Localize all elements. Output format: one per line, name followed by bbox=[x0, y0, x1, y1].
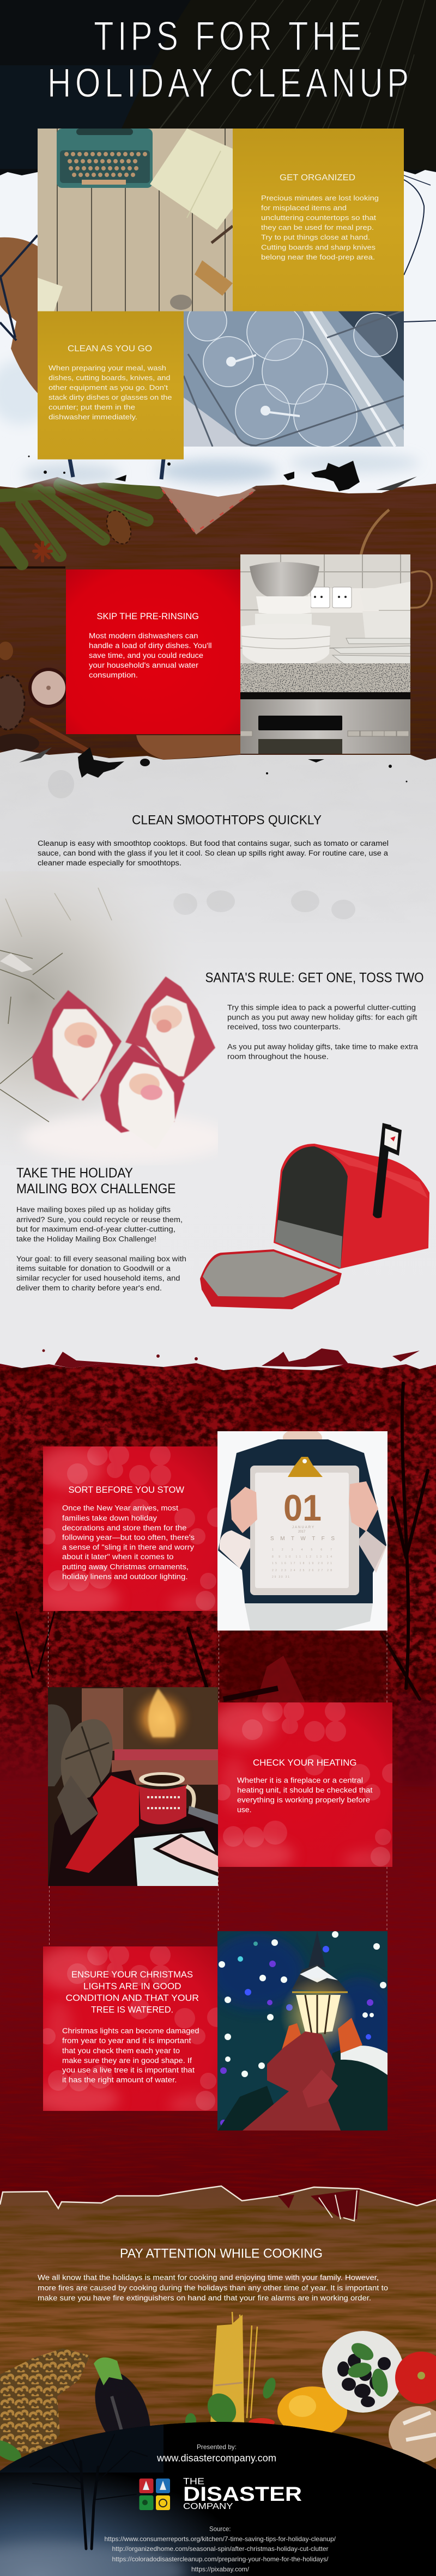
sources bbox=[105, 2525, 336, 2573]
text block: cooking: make sure you have fire extinguishers on hand and that your fire alarms are in working order. bbox=[38, 2294, 371, 2302]
text block: save time, and you could reduce bbox=[89, 651, 203, 660]
paper torn edge over red bbox=[0, 1345, 436, 1370]
text block: they can be used for meal prep. bbox=[261, 223, 374, 231]
text block bbox=[237, 1777, 373, 1814]
heading: SKIP THE PRE-RINSING bbox=[97, 611, 199, 621]
text block: smoothtops bbox=[38, 839, 389, 867]
text block: santa's rule: room throughout the house. bbox=[227, 1052, 329, 1061]
background: dark broom header bbox=[0, 0, 436, 175]
title: TIPS FOR THE bbox=[94, 14, 361, 59]
photo: dishes on kitchen counter above dishwasher bbox=[240, 554, 410, 754]
heading: LIGHTS ARE IN GOOD bbox=[83, 1981, 181, 1991]
heading: GET ORGANIZED bbox=[280, 173, 355, 182]
icon: candle bbox=[28, 668, 69, 708]
heading: SORT BEFORE YOU STOW bbox=[69, 1485, 184, 1495]
text block: mailing box: Have mailing boxes piled up as holiday gifts bbox=[16, 1206, 171, 1213]
icon: plate with olives bbox=[322, 2331, 404, 2413]
panel: get organized bbox=[233, 129, 404, 312]
icon: basil leaves bbox=[0, 2376, 278, 2465]
text block: smoothtops: sauce, can bond with the glass if you let it cool. So clean up spills right away. For routine care, use a bbox=[38, 849, 389, 857]
text block: smoothtops: Cleanup is easy with smoothtop cooktops. But food that contains sugar, such as tomato or caramel bbox=[38, 839, 389, 847]
footer panel bbox=[0, 2418, 436, 2576]
text block: Once the New Year arrives, most bbox=[62, 1504, 178, 1512]
photo: fireplace with mug and slippers bbox=[48, 1686, 218, 1886]
text block: santa's rule: received, toss two counterparts. bbox=[227, 1023, 341, 1031]
text block: about it later" when it comes to bbox=[62, 1553, 173, 1561]
photo: person holding january calendar: JANUARY bbox=[292, 1526, 314, 1529]
text block: santa's rule: punch as you put away new holiday gifts: for each gift bbox=[227, 1013, 417, 1022]
text block: counter; put them in the bbox=[49, 403, 135, 411]
icon: spaghetti bundle bbox=[210, 2312, 257, 2424]
text: presented by: Presented by: bbox=[197, 2443, 237, 2451]
text block: putting away Christmas ornaments, bbox=[62, 1563, 189, 1571]
text block: you use a live tree it is important that bbox=[62, 2066, 195, 2074]
text block: mailing box: items suitable for donation to Goodwill or a bbox=[16, 1265, 171, 1272]
text block: dishes, cutting boards, knives, and bbox=[49, 374, 170, 382]
background: wooden table with food bbox=[0, 2186, 436, 2483]
text block: families take down holiday bbox=[62, 1514, 157, 1522]
icon: dried orange bbox=[136, 735, 240, 760]
photo: person holding january calendar: 01 bbox=[283, 1487, 322, 1529]
text block: everything is working properly before bbox=[237, 1796, 370, 1804]
heading: pay attention while cooking: PAY ATTENTION WHILE COOKING bbox=[120, 2246, 323, 2261]
icon: ink splatter bbox=[28, 455, 417, 491]
icon: brown leaf and branch bbox=[0, 235, 38, 393]
text block: a sense of "sling it in there and worry bbox=[62, 1543, 194, 1551]
text block: santa's rule bbox=[227, 1003, 419, 1061]
decorative stains bbox=[48, 770, 355, 919]
sources: Source: bbox=[209, 2525, 231, 2532]
text block: When preparing your meal, wash bbox=[49, 364, 166, 372]
text block bbox=[62, 1504, 195, 1580]
text block: Whether it is a fireplace or a central bbox=[237, 1777, 363, 1784]
text block: cooking bbox=[38, 2273, 388, 2302]
panel: check your heating bbox=[207, 1701, 402, 1871]
text block: mailing box: arrived? Sure, you could recycle or reuse them, bbox=[16, 1216, 183, 1224]
text block: it has the right amount of water. bbox=[62, 2076, 177, 2084]
panel: skip the pre-rinsing bbox=[66, 570, 240, 734]
photo: carved wooden santas in snow bbox=[0, 871, 229, 1165]
text block: uncluttering countertops so that bbox=[261, 213, 376, 222]
text block: Most modern dishwashers can bbox=[89, 632, 198, 640]
text block: mailing box: take the Holiday Mailing Box Challenge! bbox=[16, 1235, 156, 1243]
background: snowy section bbox=[0, 163, 436, 497]
text block: make sure they are in good shape. If bbox=[62, 2056, 192, 2065]
icon: red tomato hint bbox=[249, 2418, 275, 2427]
heading: holiday mailing box challenge: TAKE THE HOLIDAY bbox=[16, 1165, 133, 1181]
text block: from year to year and it is important bbox=[62, 2037, 191, 2044]
photo: snowy street lamp with red bow bbox=[217, 1931, 387, 2131]
icon: broom bristles bbox=[104, 0, 436, 170]
text block bbox=[89, 632, 211, 679]
heading: CHECK YOUR HEATING bbox=[253, 1757, 356, 1768]
photo: person holding january calendar: S M T W T F S bbox=[270, 1536, 335, 1542]
icon: yellow pepper bbox=[277, 2386, 347, 2437]
photo: person holding january calendar bbox=[217, 1428, 387, 1631]
text block: handle a load of dirty dishes. You'll bbox=[89, 642, 211, 650]
text block: consumption. bbox=[89, 671, 138, 679]
sources: https://pixabay.com/ bbox=[191, 2565, 250, 2573]
icon: tomato bbox=[395, 2352, 436, 2404]
heading: TREE IS WATERED. bbox=[91, 2004, 173, 2015]
panel: clean as you go bbox=[38, 312, 184, 460]
icon: macaroni pile bbox=[0, 2348, 90, 2456]
icon: santa figure left bbox=[32, 990, 122, 1101]
company name: COMPANY bbox=[183, 2502, 233, 2511]
background: grey paper section bbox=[0, 747, 436, 1370]
text block: Christmas lights can become damaged bbox=[62, 2027, 199, 2035]
text block: Try to put things close at hand. bbox=[261, 233, 370, 241]
icon: pine cone and nut bbox=[0, 642, 39, 753]
icon: santa figure front bbox=[100, 1043, 185, 1133]
company name: THE bbox=[183, 2476, 204, 2487]
background: wood section with pine and candles bbox=[0, 474, 436, 762]
heading: ENSURE YOUR CHRISTMAS bbox=[71, 1969, 193, 1980]
icon: ink splatter bbox=[19, 747, 408, 782]
photo: person holding january calendar: 15 16 17 18 19 20 21 bbox=[272, 1562, 332, 1565]
photo: person holding january calendar: 8 9 10 11 12 13 14 bbox=[272, 1555, 332, 1559]
text block: holiday linens and outdoor lighting. bbox=[62, 1573, 187, 1580]
text block: Cutting boards and sharp knives bbox=[261, 243, 376, 252]
photo: person holding january calendar: 22 23 24 25 26 27 28 bbox=[272, 1569, 332, 1572]
background: dark red forest bbox=[0, 1362, 436, 2211]
icon: envelope flap bbox=[159, 484, 256, 535]
heading: holiday mailing box challenge bbox=[16, 1165, 175, 1197]
icon: dark twigs at right bbox=[404, 175, 436, 322]
sources: https://www.consumerreports.org/kitchen/7-time-saving-tips-for-holiday-cleanup/ bbox=[105, 2535, 336, 2543]
photo: wine glasses in dishwasher bbox=[184, 302, 404, 447]
text block: santa's rule: As you put away holiday gifts, take time to make extra bbox=[227, 1042, 419, 1051]
icon: twine bbox=[361, 510, 432, 608]
title: HOLIDAY CLEANUP bbox=[47, 61, 409, 106]
text block: following year—but too often, there's bbox=[62, 1534, 195, 1541]
text block: mailing box: similar recycler for used household items, and bbox=[16, 1274, 180, 1282]
icon: cinnamon sticks bbox=[32, 720, 87, 750]
title bbox=[47, 14, 409, 106]
text block: belong near the food-prep area. bbox=[261, 253, 375, 261]
text block: cooking: We all know that the holidays is meant for cooking and enjoying time with your family. However, bbox=[38, 2273, 379, 2282]
icon: trees and cabin bbox=[16, 1383, 428, 1699]
heading: clean smoothtops quickly: CLEAN SMOOTHTOPS QUICKLY bbox=[132, 813, 322, 828]
icon: red mailbox bbox=[200, 1123, 429, 1309]
text block: santa's rule: Try this simple idea to pack a powerful clutter-cutting bbox=[227, 1003, 416, 1012]
text block: other equipment as you go. Don't bbox=[49, 383, 168, 392]
text block: decorations and store them for the bbox=[62, 1524, 186, 1532]
heading bbox=[65, 1969, 199, 2015]
text block: for misplaced items and bbox=[261, 204, 347, 212]
text block: smoothtops: cleaner made especially for smoothtops. bbox=[38, 859, 181, 867]
text block: dishwasher immediately. bbox=[49, 413, 137, 421]
text block: your household's annual water bbox=[89, 661, 199, 669]
company name: DISASTER bbox=[183, 2483, 302, 2505]
text block: Precious minutes are lost looking bbox=[261, 194, 379, 202]
photo: person holding january calendar: 1 2 3 4 5 6 7 bbox=[272, 1548, 332, 1552]
sources: http://organizedhome.com/seasonal-spin/after-christmas-holiday-cut-clutter bbox=[112, 2545, 328, 2553]
text: website: www.disastercompany.com bbox=[156, 2453, 276, 2464]
icon: bare tree bbox=[30, 2434, 147, 2549]
photo: person holding january calendar: 29 30 31 bbox=[272, 1576, 289, 1579]
icon: eggplant bbox=[84, 2358, 161, 2462]
heading: holiday mailing box challenge: MAILING BOX CHALLENGE bbox=[16, 1181, 175, 1197]
icon: bread bbox=[389, 2406, 436, 2463]
heading: CONDITION AND THAT YOUR bbox=[65, 1993, 199, 2003]
text block: that you check them each year to bbox=[62, 2047, 180, 2055]
icon: company logo squares bbox=[140, 2479, 170, 2510]
heading: CLEAN AS YOU GO bbox=[68, 344, 152, 353]
text block: mailing box bbox=[16, 1206, 186, 1292]
photo: typewriter on wooden desk bbox=[38, 129, 233, 312]
text block bbox=[261, 194, 379, 261]
text block: mailing box: deliver them to charity before year's end. bbox=[16, 1284, 162, 1292]
sources: https://coloradodisastercleanup.com/preparing-your-home-for-the-holidays/ bbox=[112, 2555, 329, 2563]
text block: mailing box: Your goal: to fill every seasonal mailing box with bbox=[16, 1255, 186, 1263]
text block: cooking: more fires are caused by cooking during the holidays than any other time of year. It is important to bbox=[38, 2284, 388, 2292]
text block: mailing box: but for maximum end-of-year clutter-cutting, bbox=[16, 1225, 175, 1233]
icon: star anise bbox=[34, 542, 51, 561]
text block: use. bbox=[237, 1806, 252, 1814]
text block: stack dirty dishes or glasses on the bbox=[49, 393, 172, 401]
text block: heating unit, it should be checked that bbox=[237, 1786, 373, 1794]
text block bbox=[62, 2027, 199, 2084]
panel: sort before you stow bbox=[32, 1445, 227, 1615]
text block bbox=[49, 364, 172, 421]
panel: christmas lights and tree bbox=[32, 1945, 227, 2115]
icon: santa figure back bbox=[125, 976, 215, 1084]
icon: pine cone bbox=[102, 507, 136, 547]
dashed connector lines bbox=[48, 1612, 387, 1946]
icon: pine branches bbox=[0, 482, 158, 564]
photo: person holding january calendar: 2017 bbox=[298, 1530, 306, 1534]
company name bbox=[183, 2476, 302, 2511]
